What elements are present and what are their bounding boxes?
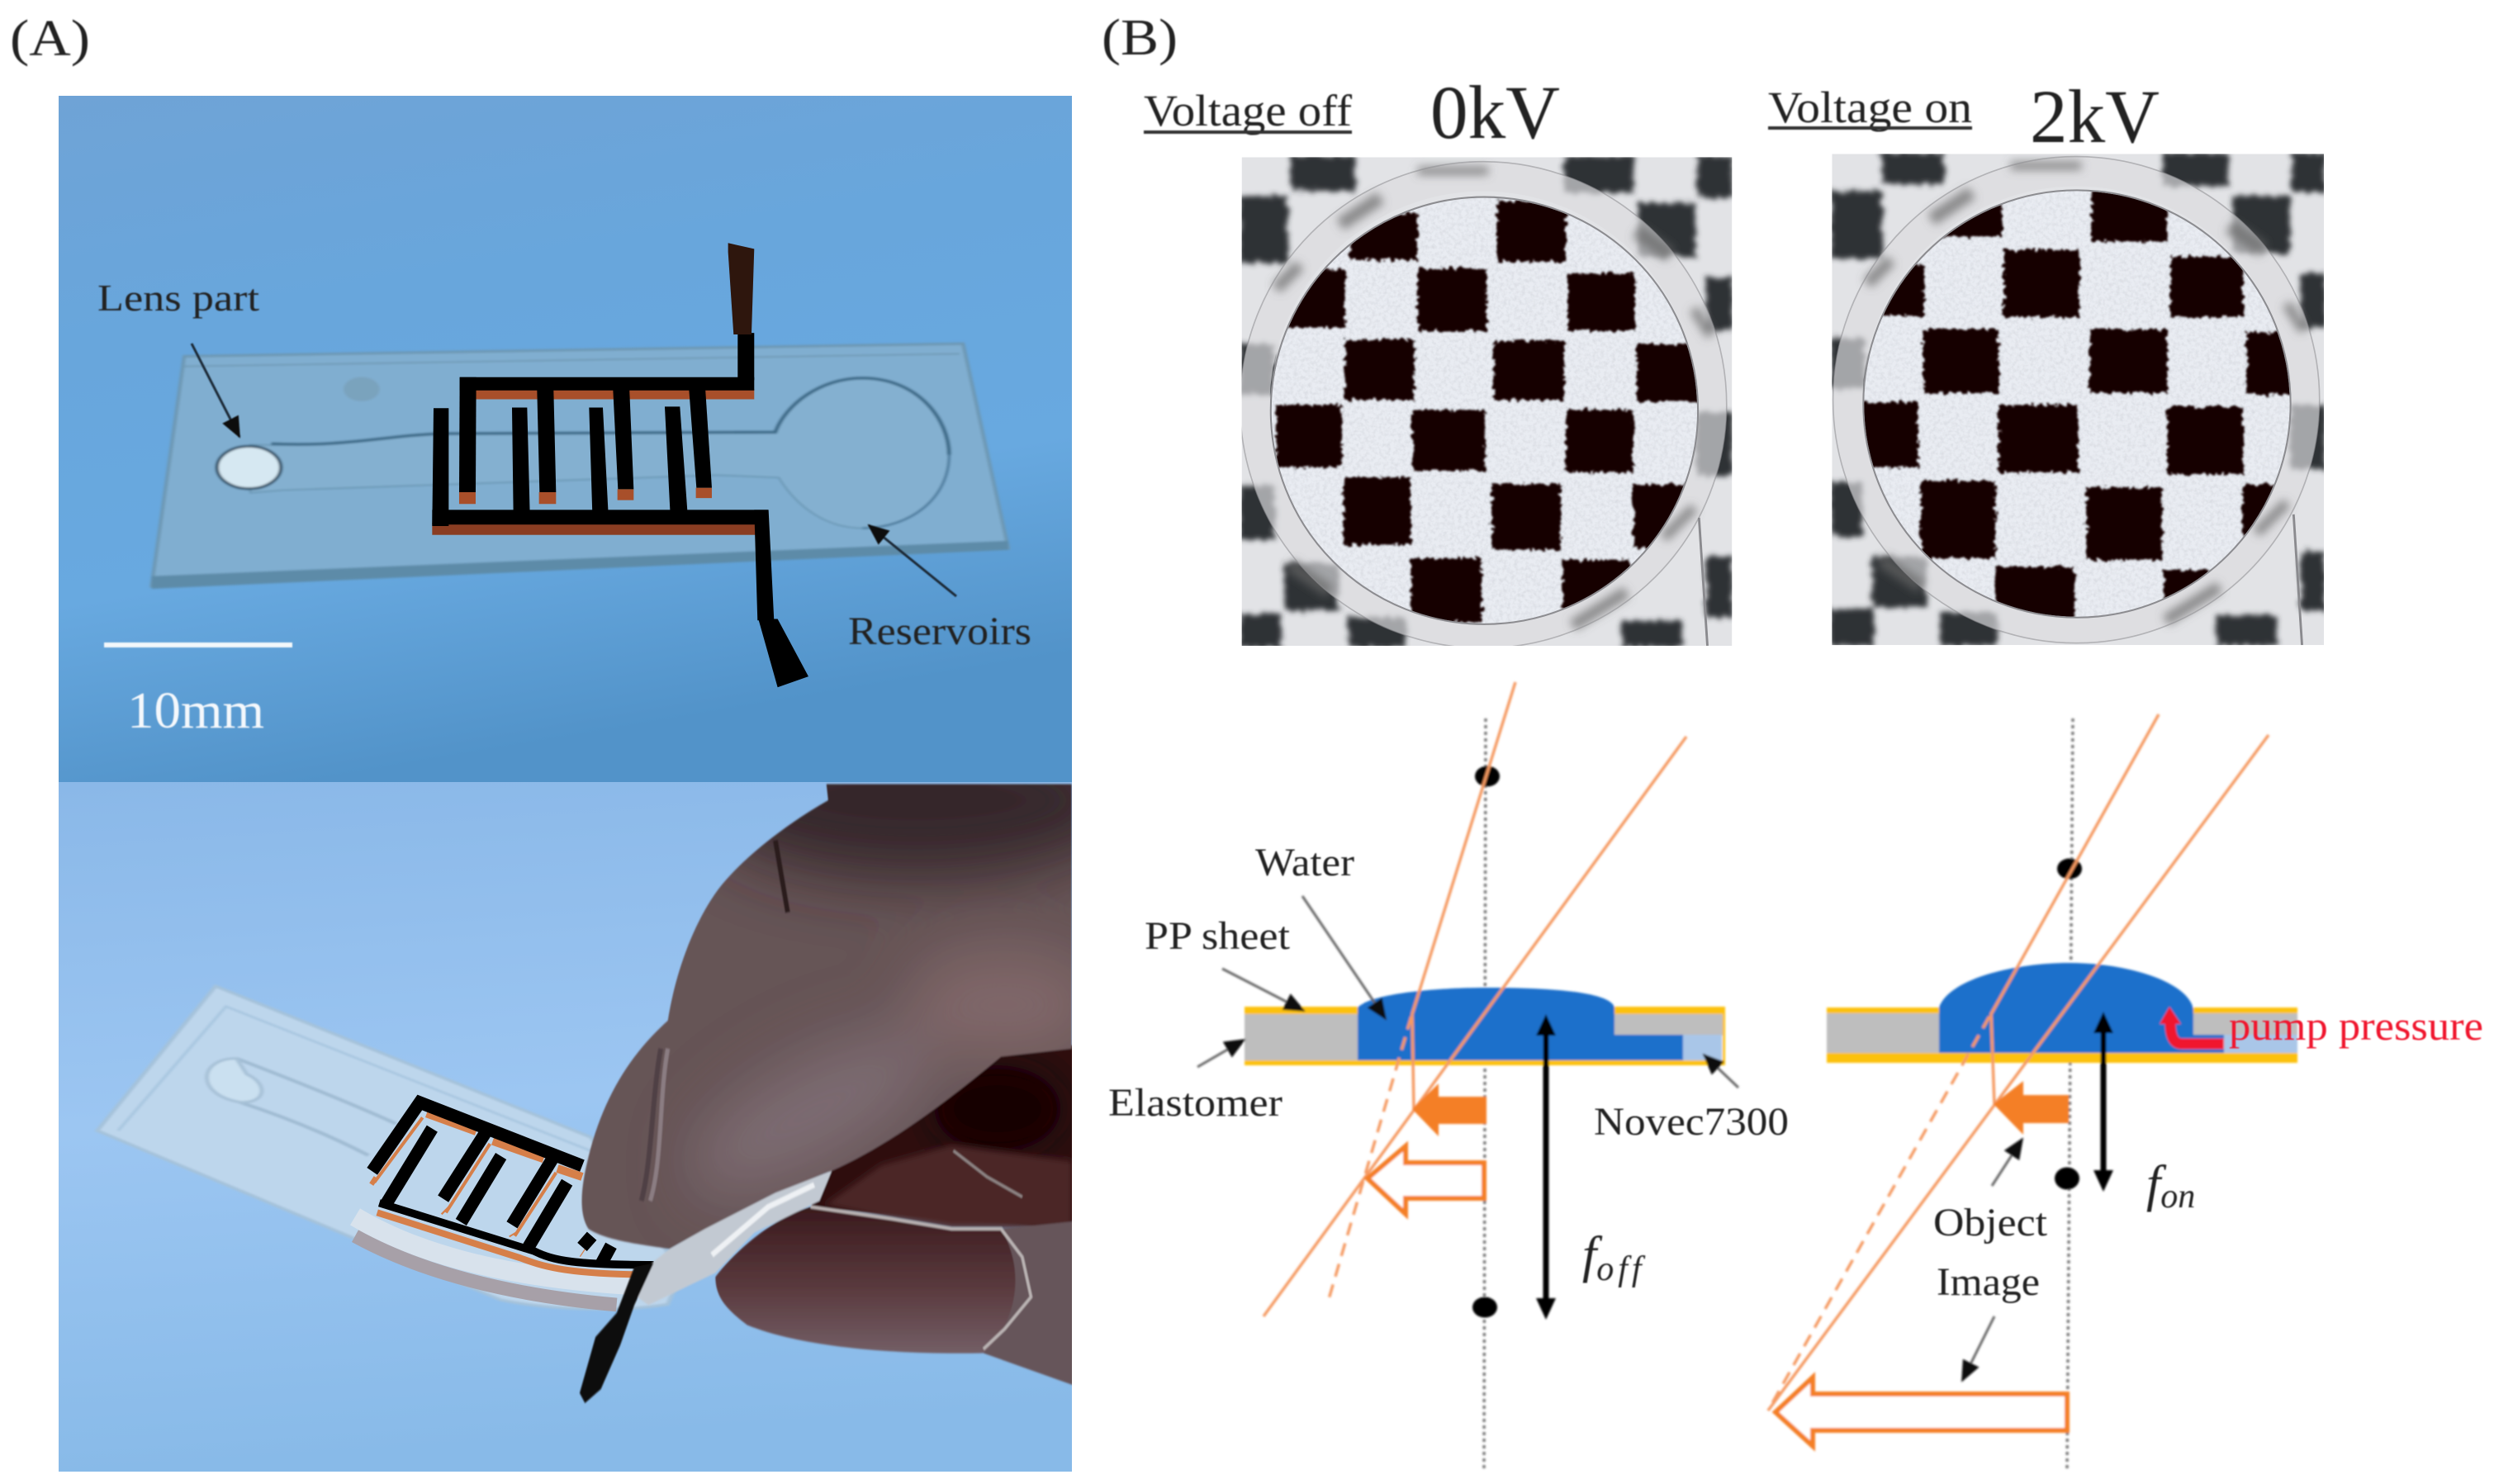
- fingernail and glass edge: [634, 1171, 832, 1305]
- label: f on: f: [2146, 1156, 2160, 1212]
- electrode pattern on bent device: [355, 1102, 654, 1305]
- ring shaded streaks: [1276, 171, 1711, 626]
- label: Lens part: [97, 277, 259, 437]
- label: f off: off: [1596, 1250, 1646, 1288]
- leader: object: [1992, 1139, 2022, 1186]
- image arrow: [1368, 1146, 1484, 1214]
- glass lower rim: [355, 1216, 636, 1286]
- leader: elastomer: [1197, 1040, 1245, 1067]
- lower focal point: [2055, 1168, 2079, 1189]
- heading: 2kV: 2kV: [2030, 74, 2160, 159]
- heading: voltage off: Voltage off: [1144, 86, 1352, 135]
- orange backing: [372, 1113, 633, 1274]
- light rays: [1768, 714, 2269, 1411]
- image arrow: [1776, 1377, 2067, 1446]
- upper electrode tip: [728, 243, 754, 334]
- object arrow: [1994, 1081, 2069, 1135]
- elastomer layer: [1827, 1011, 2297, 1055]
- label: Object: Object: [1933, 1201, 2048, 1245]
- label: Lens part: Lens part: [97, 277, 259, 319]
- label: f on: on: [2160, 1178, 2195, 1216]
- outer checker squares: [1830, 152, 2326, 646]
- panel A: top photo of flat device: [59, 96, 1072, 782]
- panel label: A: (A): [10, 11, 90, 67]
- PP sheet layers: [1245, 1007, 1725, 1065]
- object arrow: [1412, 1083, 1486, 1136]
- bent glass substrate: [97, 986, 681, 1309]
- PP sheet layers: [1827, 1008, 2297, 1063]
- skin crack lines: [811, 1207, 1031, 1349]
- label: Reservoirs: Reservoirs: [848, 609, 1031, 653]
- ring shaded streaks: [1867, 166, 2304, 620]
- water lens: [1358, 988, 1683, 1061]
- photo: checkerboard through lens at 0 kV: [1239, 155, 1733, 648]
- heading: voltage on: Voltage on: [1768, 83, 1972, 132]
- diagram: voltage on lens cross-section: [1768, 714, 2297, 1469]
- inner checker squares: [1861, 184, 2298, 626]
- label: PP sheet: PP sheet: [1145, 914, 1291, 958]
- comb electrodes: [432, 243, 808, 687]
- electrode lead: [580, 1263, 654, 1403]
- scale bar: [104, 642, 292, 739]
- upper focal point: [1475, 766, 1500, 786]
- lower comb: [432, 406, 808, 687]
- leader: water: [1302, 896, 1386, 1019]
- glass substrate with channel: [152, 344, 1008, 589]
- focal length arrow: [1543, 1031, 1549, 1303]
- label: Elastomer: Elastomer: [1108, 1081, 1283, 1125]
- lower focal point: [1472, 1297, 1497, 1318]
- black traces: [372, 1102, 611, 1264]
- Novec7300 reservoir: [1683, 1035, 1722, 1061]
- inner checker squares: [1266, 191, 1704, 629]
- lens ring: [1848, 172, 2305, 628]
- optical axis: [1484, 718, 1486, 1469]
- upper finger: [564, 724, 1128, 1257]
- label: pump pressure: pump pressure: [2229, 1003, 2483, 1049]
- panel label: B: (B): [1102, 10, 1178, 66]
- panel A: bottom photo of bent device held in fingers: [59, 782, 1072, 1472]
- upper comb: [459, 333, 754, 492]
- label: Reservoirs: [848, 525, 1031, 653]
- optical axis: [2067, 718, 2073, 1469]
- label: Novec7300: Novec7300: [1594, 1100, 1789, 1144]
- channel and reservoir: [249, 443, 862, 529]
- heading: 0kV: 0kV: [1430, 70, 1560, 154]
- elastomer layer: [1245, 1012, 1725, 1062]
- light rays: [1264, 682, 1686, 1316]
- leader: image: [1962, 1316, 1994, 1381]
- diagram: voltage off lens cross-section: [1197, 682, 1738, 1469]
- ring highlights: [1833, 157, 2320, 643]
- leader: PP sheet: [1222, 969, 1304, 1011]
- Novec7300 reservoir: [2224, 1035, 2297, 1054]
- shadow between fingers: [811, 1045, 1079, 1229]
- label: Image: Image: [1937, 1260, 2040, 1304]
- focal length arrow: [2101, 1028, 2106, 1175]
- pump pressure arrow: [2160, 1007, 2224, 1044]
- ring highlights: [1240, 162, 1727, 648]
- label: f off: f: [1582, 1227, 1596, 1283]
- water lens: [1939, 963, 2224, 1054]
- fingers: [564, 724, 1128, 1403]
- upper focal point: [2057, 859, 2082, 879]
- photo: checkerboard through lens at 2 kV: [1830, 152, 2326, 646]
- lens ring: [1255, 177, 1712, 633]
- scale bar: 10mm: [127, 683, 264, 739]
- leader: Novec7300: [1704, 1055, 1738, 1088]
- outer checker squares: [1239, 155, 1733, 647]
- lens opening: [217, 446, 281, 489]
- orange backing: [432, 389, 756, 535]
- label: Water: Water: [1255, 841, 1354, 884]
- lower finger: [715, 1150, 1079, 1387]
